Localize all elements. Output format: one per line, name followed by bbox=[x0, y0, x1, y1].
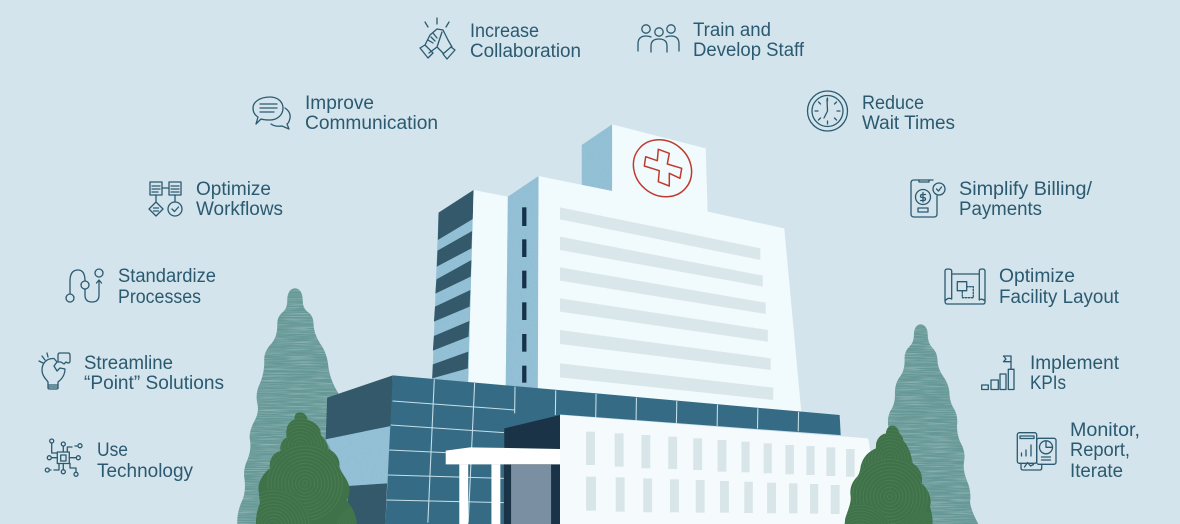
item: Optimize Workflows: Workflows bbox=[196, 199, 283, 220]
item: Train and Develop Staff: Develop Staff bbox=[693, 40, 805, 61]
item: Monitor, Report, Iterate: Iterate bbox=[1070, 461, 1123, 482]
item: Implement KPIs bbox=[982, 353, 1120, 394]
icon: team bbox=[638, 25, 679, 52]
item: Increase Collaboration bbox=[420, 18, 581, 62]
item: Simplify Billing/Payments: Payments bbox=[959, 199, 1042, 220]
icon: clock bbox=[808, 91, 848, 131]
rear tower side with dark bands bbox=[432, 190, 474, 383]
item: Increase Collaboration: Increase bbox=[470, 21, 539, 42]
icon: workflow bbox=[149, 182, 182, 216]
item: Implement KPIs: KPIs bbox=[1030, 373, 1066, 394]
tree: tall right conifer bbox=[888, 324, 978, 524]
icon: high five bbox=[420, 18, 455, 59]
item: Streamline Point Solutions: “Point” Solutions bbox=[84, 373, 224, 394]
item: Optimize Workflows: Optimize bbox=[196, 179, 271, 200]
icon: reports dashboard bbox=[1017, 433, 1056, 470]
item: Standardize Processes: Processes bbox=[118, 287, 201, 308]
item: Optimize Facility Layout bbox=[945, 266, 1120, 308]
item: Improve Communication: Communication bbox=[305, 113, 438, 134]
icon: blueprint bbox=[945, 269, 985, 304]
red cross sign bbox=[622, 128, 703, 209]
item: Standardize Processes bbox=[66, 266, 216, 308]
main tower front with window bands bbox=[538, 176, 801, 413]
item: Implement KPIs: Implement bbox=[1030, 353, 1120, 374]
icon: speech bubbles bbox=[253, 97, 290, 129]
item: Reduce Wait Times: Reduce bbox=[862, 93, 924, 114]
item: Monitor, Report, Iterate: Monitor, bbox=[1070, 420, 1140, 441]
icon: process path bbox=[66, 269, 103, 302]
icon: phone payment bbox=[911, 180, 945, 217]
item: Increase Collaboration: Collaboration bbox=[470, 41, 581, 62]
item: Optimize Facility Layout: Optimize bbox=[999, 266, 1075, 287]
item: Monitor, Report, Iterate bbox=[1017, 420, 1140, 482]
hospital building bbox=[326, 124, 882, 524]
main tower blue side with slit windows bbox=[506, 176, 539, 390]
item: Improve Communication bbox=[253, 93, 438, 134]
rooftop sign box bbox=[582, 124, 708, 220]
item: Reduce Wait Times bbox=[808, 91, 955, 134]
tree: round left shrub bbox=[253, 410, 360, 524]
rear tower white wall bbox=[468, 190, 508, 387]
lower white block with windows bbox=[560, 415, 882, 524]
item: Improve Communication: Improve bbox=[305, 93, 374, 114]
icon: broken light bulb bbox=[39, 353, 70, 389]
item: Optimize Facility Layout: Facility Layout bbox=[999, 287, 1120, 308]
tree: round right shrub bbox=[843, 423, 937, 524]
podium left side bbox=[326, 375, 393, 524]
item: Streamline Point Solutions: Streamline bbox=[84, 353, 173, 374]
item: Train and Develop Staff: Train and bbox=[693, 20, 771, 41]
item: Train and Develop Staff bbox=[638, 20, 805, 61]
item: Streamline Point Solutions bbox=[39, 353, 224, 394]
podium glass curtain wall bbox=[385, 375, 841, 524]
icon: rising bars with flag bbox=[982, 356, 1014, 390]
item: Reduce Wait Times: Wait Times bbox=[862, 113, 955, 134]
item: Standardize Processes: Standardize bbox=[118, 266, 216, 287]
icon: circuit chip bbox=[45, 439, 82, 476]
item: Use Technology bbox=[45, 439, 193, 482]
item: Simplify Billing/Payments bbox=[911, 179, 1093, 220]
item: Use Technology: Technology bbox=[97, 461, 193, 482]
item: Simplify Billing/Payments: Simplify Billing/ bbox=[959, 179, 1093, 200]
item: Use Technology: Use bbox=[97, 440, 128, 461]
item: Monitor, Report, Iterate: Report, bbox=[1070, 440, 1130, 461]
item: Optimize Workflows bbox=[149, 179, 283, 220]
tree: tall left conifer bbox=[237, 288, 363, 524]
entrance with door and canopy bbox=[446, 415, 560, 524]
